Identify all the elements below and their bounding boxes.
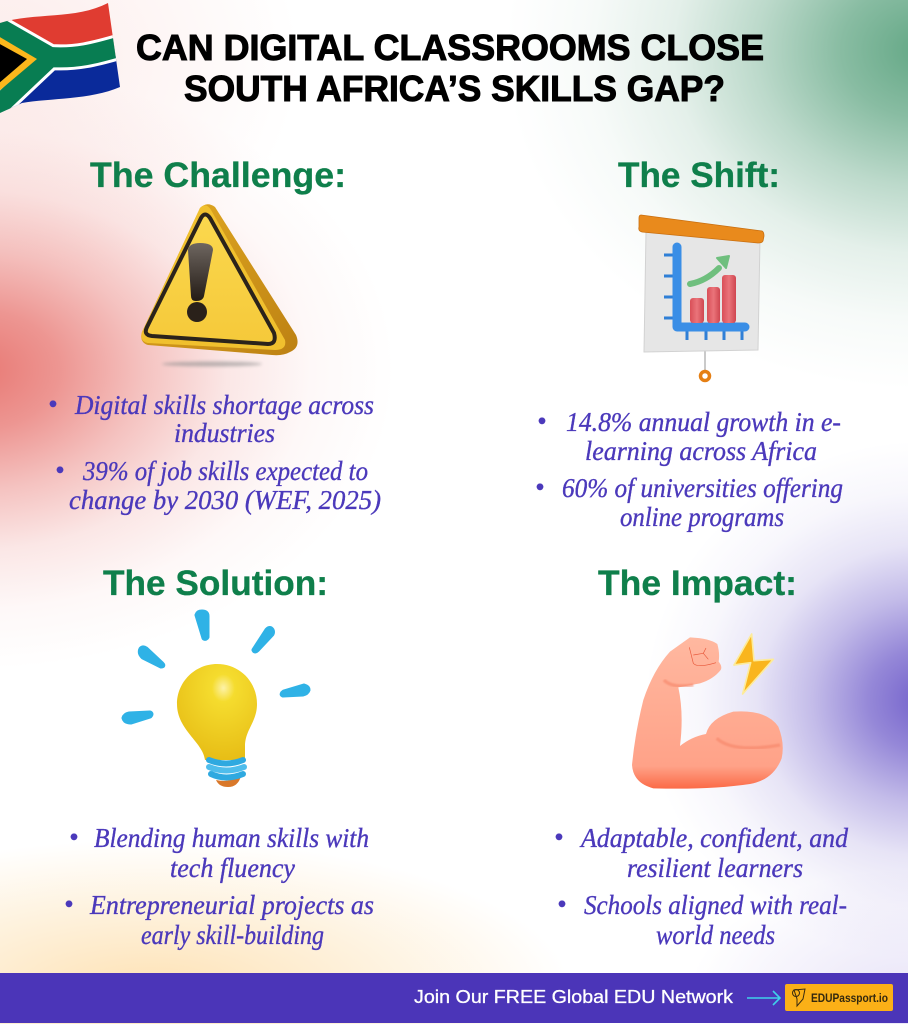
icon: South African flag bbox=[0, 0, 125, 110]
bullet text: 39% of job skills expected to bbox=[82, 456, 368, 486]
bullet text: early skill-building bbox=[141, 920, 324, 950]
title: CAN DIGITAL CLASSROOMS CLOSE bbox=[136, 27, 764, 68]
logo button: EDUPassport.io: EDUPassport.io bbox=[811, 993, 888, 1005]
bullet text: Adaptable, confident, and bbox=[579, 823, 848, 853]
bullet text: tech fluency bbox=[170, 853, 295, 883]
heading: the shift: The Shift: bbox=[618, 156, 780, 195]
icon: light bulb bbox=[124, 612, 308, 787]
bullet text bbox=[554, 822, 848, 950]
panel: the challenge bbox=[48, 156, 381, 515]
bullet text: resilient learners bbox=[627, 853, 803, 883]
heading: the challenge: The Challenge: bbox=[90, 156, 346, 195]
bullet text: • bbox=[64, 889, 73, 919]
icon: warning triangle bbox=[141, 204, 298, 366]
heading: the impact: The Impact: bbox=[598, 564, 797, 603]
panel: the impact bbox=[554, 564, 848, 950]
bullet text: 14.8% annual growth in e- bbox=[566, 407, 841, 437]
icon: presentation board with rising chart bbox=[639, 215, 764, 380]
bullet text bbox=[535, 406, 843, 532]
panel: the solution bbox=[64, 564, 374, 950]
arrow bbox=[747, 991, 780, 1005]
logo button: EDUPassport.io bbox=[785, 984, 893, 1011]
bullet text: learning across Africa bbox=[585, 436, 817, 466]
bullet text: • bbox=[55, 455, 64, 485]
bullet text: 60% of universities offering bbox=[562, 473, 843, 503]
title: SOUTH AFRICA’S SKILLS GAP? bbox=[184, 68, 725, 109]
bullet text: • bbox=[48, 389, 57, 419]
bullet text: world needs bbox=[656, 920, 775, 950]
footer call to action: Join Our FREE Global EDU Network bbox=[414, 987, 734, 1007]
bullet text bbox=[64, 822, 374, 950]
bullet text: • bbox=[557, 889, 566, 919]
bullet text: • bbox=[69, 822, 78, 852]
bullet text: • bbox=[535, 472, 544, 502]
bullet text: industries bbox=[174, 418, 275, 448]
title bbox=[136, 27, 764, 109]
bullet text: Digital skills shortage across bbox=[74, 390, 374, 420]
bullet text: Schools aligned with real- bbox=[584, 890, 847, 920]
bullet text: • bbox=[554, 822, 563, 852]
heading: the solution: The Solution: bbox=[103, 564, 328, 603]
bullet text: Blending human skills with bbox=[94, 823, 369, 853]
icon: flexed arm with lightning bolt bbox=[632, 634, 783, 789]
bullet text: • bbox=[537, 406, 546, 436]
footer banner bbox=[0, 973, 908, 1023]
bullet text bbox=[48, 389, 381, 515]
bullet text: change by 2030 (WEF, 2025) bbox=[69, 485, 381, 515]
bullet text: online programs bbox=[620, 502, 784, 532]
panel: the shift bbox=[535, 156, 843, 532]
bullet text: Entrepreneurial projects as bbox=[89, 890, 374, 920]
